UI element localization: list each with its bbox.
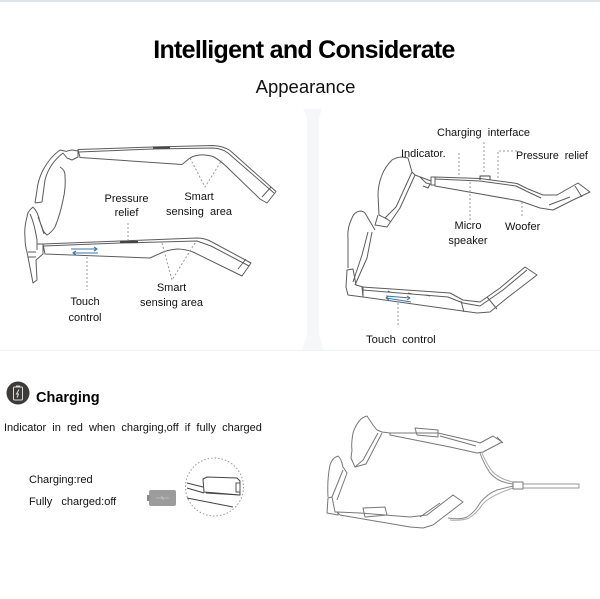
upper arm with clip <box>351 416 503 467</box>
top strip <box>0 0 600 2</box>
label: pressure relief right: Pressure relief <box>516 150 588 162</box>
icon: zoomed charging connector circle <box>185 458 244 516</box>
label: smart sensing area lower: Smart sensing area <box>140 282 203 309</box>
icon: gray battery <box>147 490 176 506</box>
label: smart sensing area upper: Smart sensing area <box>166 191 232 218</box>
lower arm with clip <box>327 456 463 528</box>
label: pressure relief left: Pressure relief <box>104 193 149 219</box>
icon: battery badge <box>6 382 30 404</box>
label: touch control left: Touch control <box>68 296 102 324</box>
upper arm <box>375 157 590 227</box>
label: woofer: Woofer <box>505 221 540 233</box>
charging bracket <box>480 176 490 180</box>
label: touch control right: Touch control <box>366 334 436 346</box>
subtitle: Appearance <box>256 76 355 97</box>
leader lines <box>87 158 222 290</box>
touch arrows <box>386 296 411 302</box>
upper arm <box>35 146 276 235</box>
label: micro speaker: Micro speaker <box>448 220 488 247</box>
label: fully charged off: Fully charged:off <box>29 496 116 508</box>
charging description: Indicator in red when charging,off if fully charged <box>4 422 262 434</box>
label: charging red: Charging:red <box>29 474 93 486</box>
lower arm <box>25 207 251 283</box>
label: indicator: Indicator. <box>401 148 446 160</box>
leader lines <box>398 142 522 325</box>
lower arm and second lens <box>346 211 537 313</box>
charging cable <box>448 453 579 520</box>
touch arrows <box>71 247 98 255</box>
title: Intelligent and Considerate <box>153 36 455 64</box>
heading: charging: Charging <box>36 390 100 406</box>
label: charging interface: Charging interface <box>437 127 530 139</box>
